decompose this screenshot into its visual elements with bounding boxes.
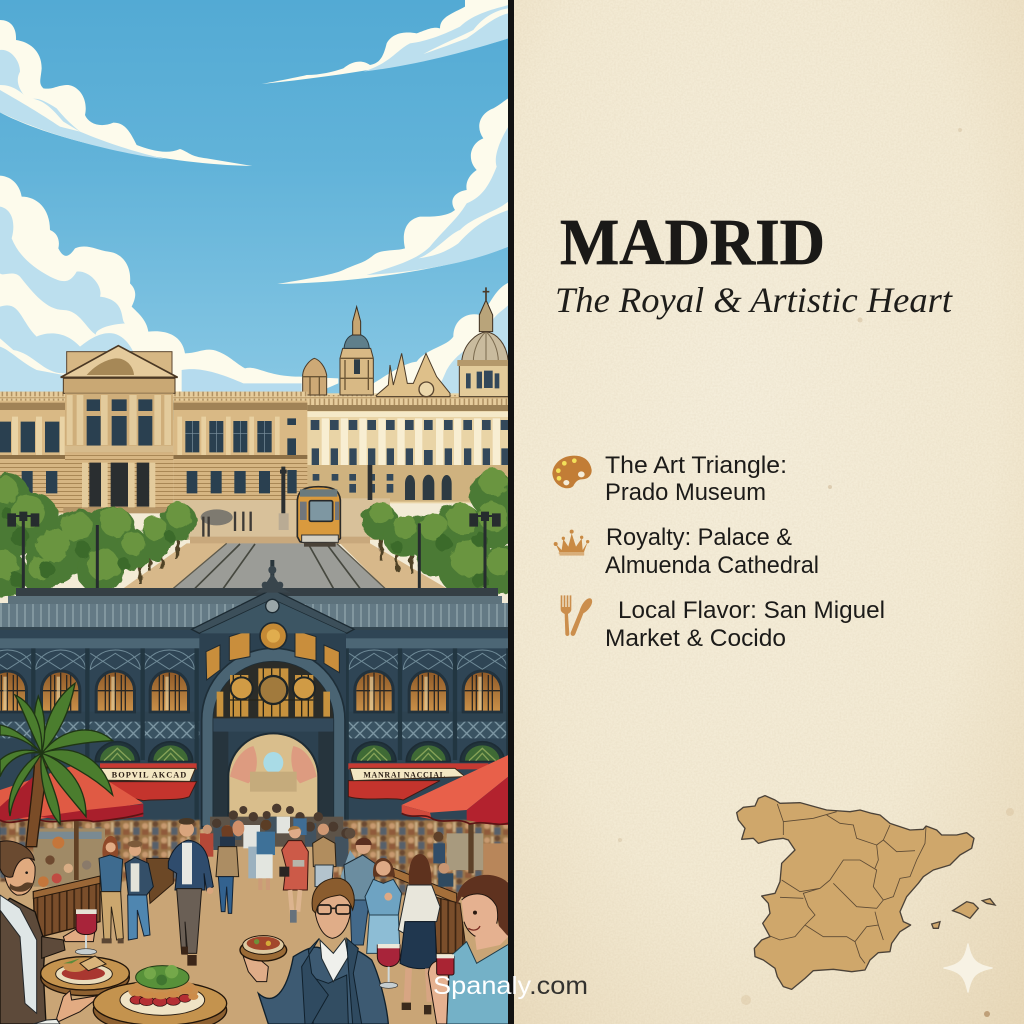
map of Spain: [737, 796, 995, 989]
subtitle: The Royal & Artistic Heart: [555, 280, 953, 320]
right trees: [360, 467, 508, 594]
market facade: [0, 560, 510, 897]
icon: palette: [552, 456, 592, 488]
head: [315, 891, 351, 938]
watermark: Spanaly .com: [433, 972, 588, 1000]
jacket: [258, 947, 388, 1024]
title: MADRID: [560, 206, 825, 279]
foreground: left man with plates: [0, 841, 227, 1024]
market hall roof: [0, 588, 508, 633]
central gate: [192, 560, 354, 830]
list item: art: [552, 452, 787, 506]
man in grey sweater: [341, 828, 375, 945]
icon: crown: [554, 530, 589, 555]
left market umbrella: [0, 763, 143, 822]
foreground: woman with cup: [428, 875, 510, 1024]
sand paths: [123, 543, 447, 588]
sky: [0, 0, 508, 420]
woman in red dress: [279, 826, 308, 923]
right stall interior: [333, 820, 510, 895]
panel: illustrated Madrid scene: [0, 0, 526, 1024]
woman with tan bag: [216, 825, 239, 913]
walker in white shorts: [256, 820, 275, 890]
foreground: man with glasses: [240, 878, 400, 1024]
walking man in navy jacket: [168, 818, 213, 966]
man in tan sweater: [313, 824, 336, 887]
lower green arches: [95, 742, 504, 762]
raised hand: [243, 957, 268, 982]
portico with pediment: [61, 346, 178, 513]
hand holding plate: [57, 991, 102, 1022]
left stall interior: [0, 820, 200, 882]
pediment with finial: [192, 560, 354, 633]
panel: parchment background: [510, 0, 1024, 1024]
plate with sandwich: [41, 956, 129, 996]
plate with salad: [93, 965, 227, 1024]
palm tree: [0, 683, 113, 847]
left awning: [100, 763, 198, 802]
man in blue jacket: [125, 841, 153, 940]
plaza: [173, 500, 307, 540]
lamp posts behind: [280, 467, 287, 513]
clouds: [0, 0, 508, 400]
right palace: [303, 287, 512, 503]
divider: [508, 0, 514, 1024]
plate with tapas: [240, 939, 287, 961]
right stall counter: [393, 868, 457, 903]
entrance view: [228, 733, 318, 820]
list item: art: Prado Museum: [605, 479, 766, 506]
woman from behind: [398, 854, 440, 1014]
left stall counter: [33, 877, 100, 938]
left trees: [0, 473, 197, 597]
awnings and signs: [0, 683, 508, 847]
middle wing: [173, 392, 307, 513]
tram: [297, 487, 340, 547]
icon: fork and whisk: [561, 595, 592, 636]
icon: sparkle: [944, 944, 992, 992]
list item: food: Local Flavor: San Miguel: [618, 597, 885, 624]
list item: royalty: [554, 524, 819, 579]
market ground and stalls: [0, 820, 510, 1024]
right awning: MANRAI NACCIAL: [363, 771, 446, 780]
palace buildings: [0, 287, 526, 597]
list item: food: [561, 595, 885, 652]
wine glass: [377, 945, 400, 967]
left wing: [0, 392, 67, 513]
man: [0, 841, 95, 1024]
crowd: [99, 804, 453, 1014]
right side shopper: [433, 843, 445, 863]
woman with red hair: [99, 836, 124, 943]
list item: royalty: Royalty: Palace &: [606, 524, 792, 551]
distant crowd: [200, 804, 453, 887]
list item: food: Market & Cocido: [605, 625, 786, 652]
arched windows: [0, 650, 507, 713]
domes and towers: [340, 348, 373, 395]
right awning: [348, 763, 488, 800]
road with tracks: [173, 543, 385, 588]
right market umbrella: [402, 755, 508, 825]
street lamps: [7, 512, 501, 588]
woman in blue dress: [365, 858, 402, 953]
left awning: BOPVIL AKCAD: [112, 771, 187, 780]
list item: royalty: Almuenda Cathedral: [605, 552, 819, 579]
wine glass: [75, 909, 97, 955]
list item: art: The Art Triangle:: [605, 452, 787, 479]
